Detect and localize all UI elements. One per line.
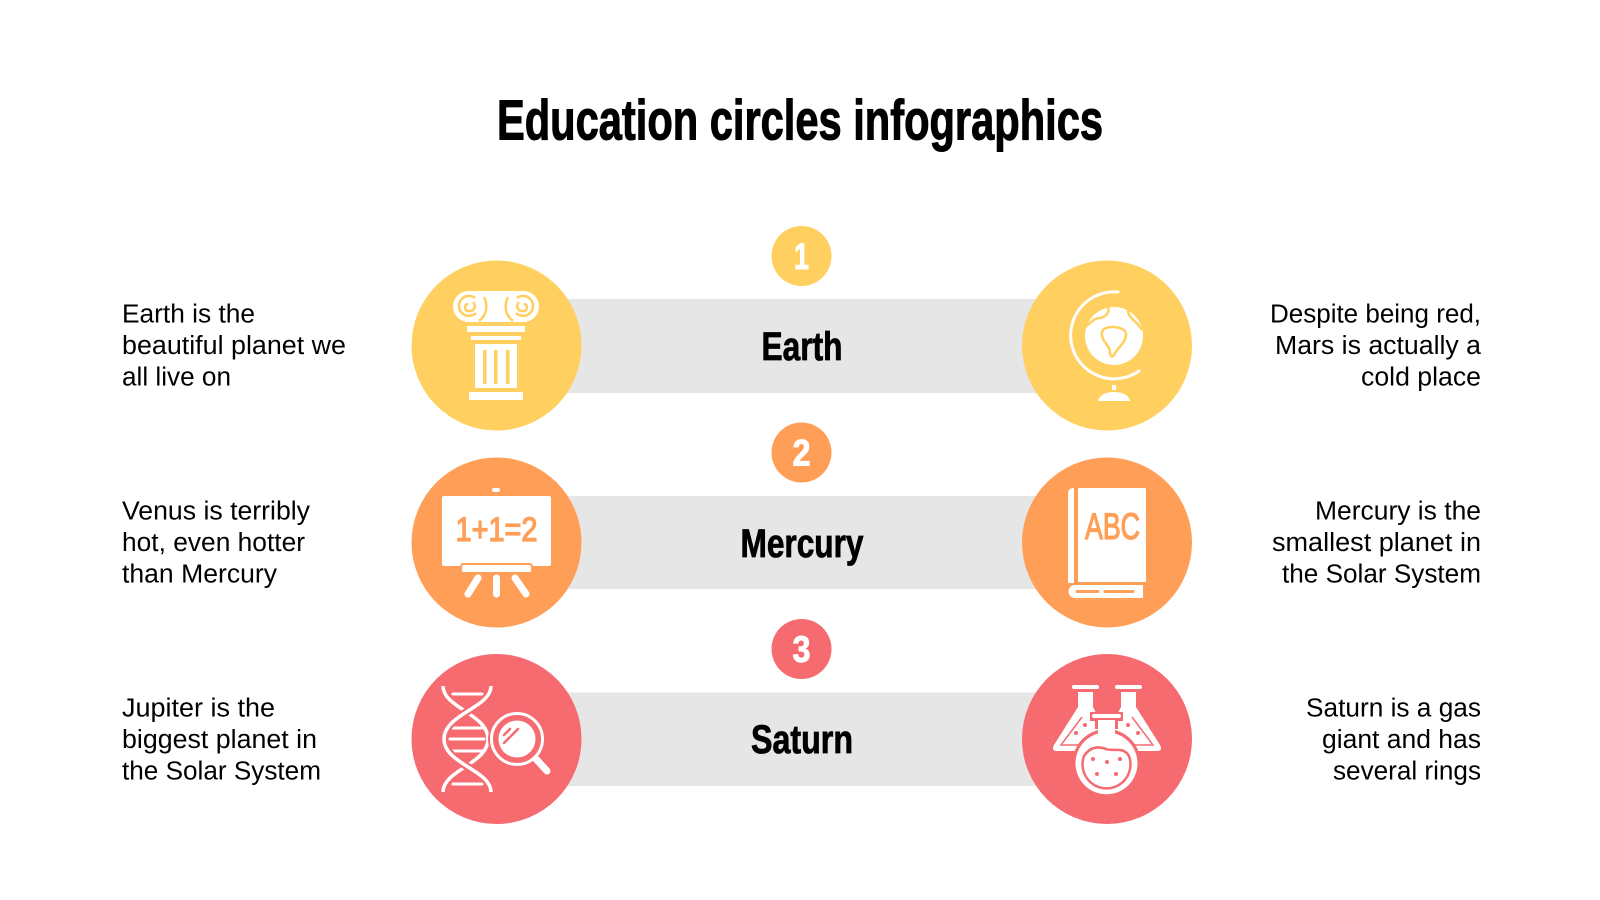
text: Earth left: all live on (122, 364, 231, 392)
title: Education circles infographics (497, 88, 1103, 152)
label: Mercury: Mercury (740, 522, 864, 566)
label: Saturn: Saturn (751, 718, 853, 762)
icon: flasks (1022, 654, 1192, 824)
text: Earth right: Despite being red, (1270, 300, 1481, 328)
number badge 3: 3 (792, 629, 810, 670)
text: Mercury left: hot, even hotter (122, 529, 306, 557)
label: Earth: Earth (762, 325, 842, 369)
text: Saturn right (1306, 694, 1481, 786)
text: Saturn left: biggest planet in (122, 726, 317, 754)
text: Mercury right (1272, 498, 1481, 588)
text: Mercury left: Venus is terribly (122, 498, 310, 526)
text: Mercury left: than Mercury (122, 560, 277, 588)
text: Mercury right: the Solar System (1282, 560, 1481, 588)
text: Earth left: Earth is the (122, 300, 255, 328)
text: Earth right (1270, 300, 1482, 392)
row: Saturn (122, 619, 1481, 824)
number badge 2 (772, 422, 832, 482)
row: Earth (122, 226, 1482, 430)
text: Saturn left: the Solar System (122, 758, 321, 786)
icon: book (1022, 458, 1192, 628)
number badge 3 (772, 619, 832, 679)
bar: Saturn (560, 692, 1050, 786)
number badge 1 (772, 226, 832, 286)
text: Saturn left: Jupiter is the (122, 694, 275, 722)
icon: chalkboard: 1+1=2 (456, 511, 538, 549)
icon: column (412, 260, 582, 430)
bar: Earth (560, 299, 1050, 393)
bar: Mercury (560, 496, 1050, 589)
icon: book: ABC (1085, 506, 1140, 547)
icon: DNA and magnifier (412, 654, 582, 824)
text: Saturn right: several rings (1333, 758, 1481, 786)
icon: chalkboard (412, 458, 582, 628)
text: Mercury right: smallest planet in (1272, 529, 1481, 557)
text: Earth right: Mars is actually a (1275, 332, 1482, 360)
row: Mercury (122, 422, 1481, 628)
text: Earth right: cold place (1361, 364, 1481, 392)
text: Mercury right: Mercury is the (1315, 498, 1481, 526)
text: Earth left: beautiful planet we (122, 332, 346, 360)
number badge 2: 2 (792, 432, 810, 474)
text: Saturn right: giant and has (1322, 726, 1481, 754)
number badge 1: 1 (794, 236, 809, 277)
text: Saturn right: Saturn is a gas (1306, 694, 1481, 722)
icon: globe (1022, 260, 1192, 430)
